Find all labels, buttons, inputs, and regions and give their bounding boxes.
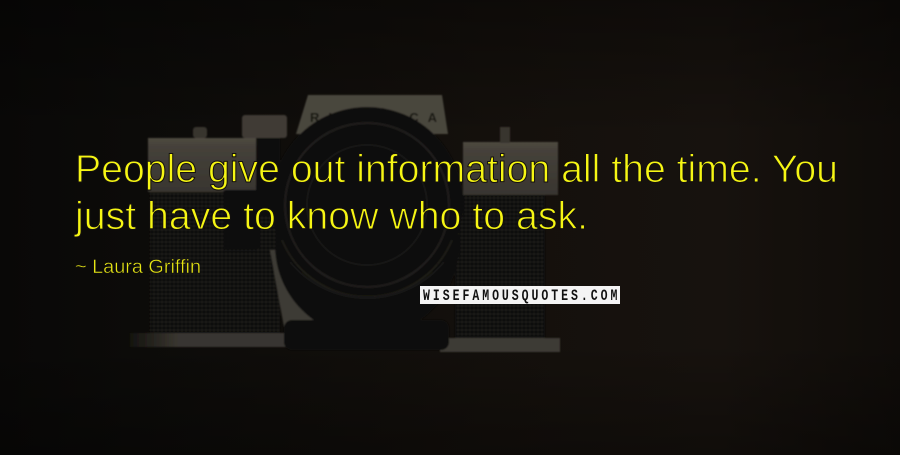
camera prism xyxy=(296,95,448,134)
camera base plate xyxy=(130,333,290,347)
camera body leatherette xyxy=(150,190,280,333)
quote line 2: just have to know who to ask. xyxy=(74,195,588,238)
watermark badge: WISEFAMOUSQUOTES.COM xyxy=(423,287,617,306)
lens rings xyxy=(285,123,449,287)
camera top plate right xyxy=(463,142,558,195)
camera top plate left xyxy=(148,138,260,192)
author attribution: ~ Laura Griffin xyxy=(75,257,201,278)
lens housing xyxy=(271,107,463,299)
camera photo xyxy=(130,95,560,352)
viewfinder strip xyxy=(223,190,259,250)
quote line 1: People give out information all the time. You xyxy=(75,148,838,191)
camera winder dial xyxy=(242,115,287,138)
quote text xyxy=(74,148,838,238)
lens mount silver xyxy=(270,250,400,327)
camera brand lettering: RICOHICA xyxy=(310,110,438,125)
